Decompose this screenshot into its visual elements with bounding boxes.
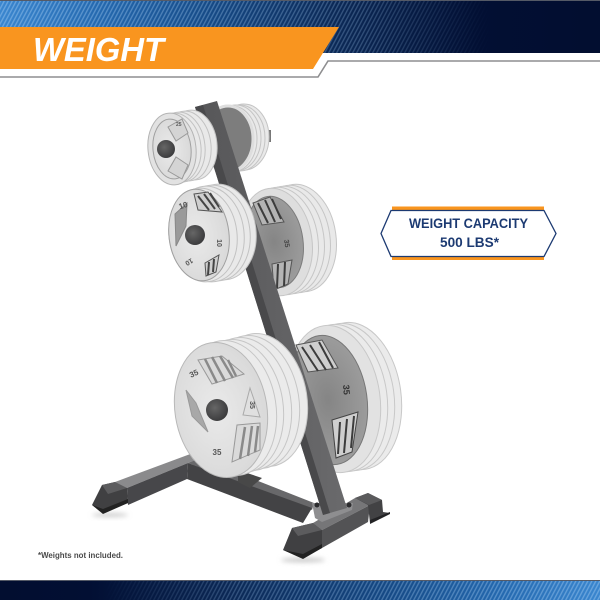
rack base (92, 453, 390, 562)
post mounting plate (312, 503, 353, 522)
rear arm (115, 453, 200, 488)
rack upright post (195, 101, 347, 515)
front crossbar (313, 498, 370, 530)
front foot (283, 523, 322, 558)
rear small weight stack (203, 104, 271, 172)
front small weight stack: 25 (176, 122, 182, 128)
rear large weight stack (278, 316, 411, 479)
callout: weight capacity: WEIGHT CAPACITY (409, 215, 529, 231)
front medium weight stack: 10 (215, 239, 222, 247)
cross rail (188, 458, 314, 510)
callout: weight capacity (381, 206, 556, 260)
footnote: *Weights not included. (38, 550, 123, 560)
front medium weight stack: 10 (178, 200, 189, 211)
title: WEIGHT (33, 31, 167, 68)
callout: weight capacity: 500 LBS* (440, 234, 500, 250)
top banner (0, 0, 600, 53)
header underline (0, 61, 600, 77)
front medium weight stack: 10 (184, 256, 194, 266)
rear large weight stack: 35 (341, 384, 352, 395)
rack and weight plates (92, 101, 411, 562)
bottom banner (0, 580, 600, 600)
front large weight stack: 35 (248, 401, 255, 409)
right foot (355, 493, 390, 523)
front large weight stack (165, 327, 317, 484)
rear medium weight stack (233, 180, 343, 300)
front small weight stack (144, 108, 221, 187)
header orange tab (0, 27, 339, 69)
front medium weight stack (164, 180, 262, 286)
front large weight stack: 35 (213, 448, 222, 457)
rear foot (92, 482, 128, 513)
front large weight stack: 35 (188, 368, 200, 380)
rear medium weight stack: 35 (282, 239, 290, 248)
